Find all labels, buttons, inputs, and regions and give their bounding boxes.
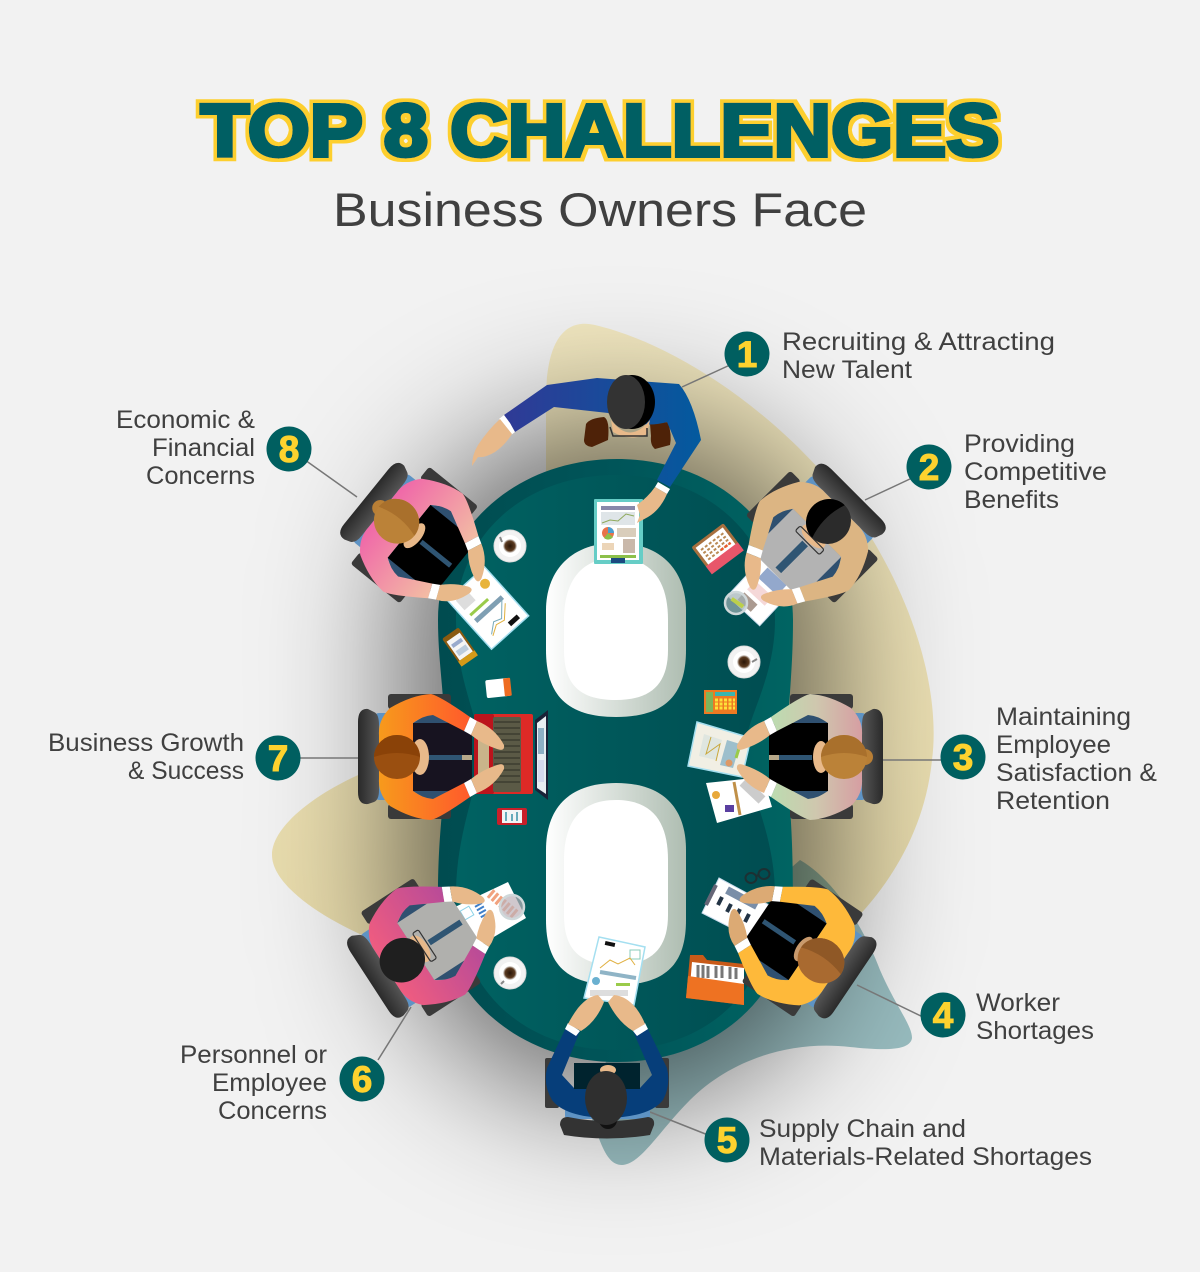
callout 2: Providing Competitive Benefits: 2 [919, 447, 939, 488]
callout 4: Worker Shortages: Worker [976, 989, 1060, 1017]
callout 6: Personnel or Employee Concerns [180, 1041, 384, 1125]
callout 2: Providing Competitive Benefits: Providing [964, 430, 1075, 458]
document 8 [447, 567, 529, 649]
document 6 [455, 882, 526, 947]
subtitle: Business Owners Face [333, 183, 867, 236]
callout 2: Providing Competitive Benefits: Benefits [964, 486, 1059, 514]
callout 1: Recruiting and Attracting New Talent: New Talent [782, 356, 912, 384]
document 2 [727, 556, 797, 626]
callout 1: Recruiting and Attracting New Talent: Recruiting & Attracting [782, 328, 1055, 356]
person 6: magenta jacket [335, 852, 522, 1034]
person 2: tan jacket [712, 449, 901, 638]
conference table [438, 459, 793, 1062]
callout 6: Personnel or Employee Concerns: Employee [212, 1069, 327, 1097]
table shadow [438, 459, 793, 1062]
document 3b [706, 777, 772, 823]
callout 3: Maintaining Employee Satisfaction and Retention: Employee [996, 731, 1111, 759]
person 4: yellow jacket [701, 851, 889, 1035]
callout 3: Maintaining Employee Satisfaction and Retention: Maintaining [996, 703, 1131, 731]
callout 4: Worker Shortages [920, 989, 1094, 1045]
notepad [485, 678, 512, 698]
title: TOP 8 CHALLENGES [200, 89, 1000, 172]
callout 8: Economic and Financial Concerns [116, 406, 312, 490]
phone on table left [442, 627, 478, 667]
coffee cup right [728, 646, 760, 678]
callout 5: Supply Chain and Materials-Related Shortages [704, 1115, 1092, 1171]
spiral planner [691, 523, 744, 574]
callout 3: Maintaining Employee Satisfaction and Retention: 3 [953, 737, 973, 778]
magnifier 6 [500, 895, 524, 919]
callout 6: Personnel or Employee Concerns: Personnel or [180, 1041, 327, 1069]
coffee cup bottom left [494, 957, 526, 989]
callout 6: Personnel or Employee Concerns: 6 [352, 1059, 372, 1100]
person 8: pink jacket [327, 448, 516, 634]
person 3: green and pink jacket [737, 694, 883, 820]
document 3a [688, 722, 751, 777]
callout 1: Recruiting and Attracting New Talent: 1 [737, 334, 757, 375]
callout 3: Maintaining Employee Satisfaction and Retention [940, 703, 1157, 815]
callout 7: Business Growth and Success: & Success [128, 757, 244, 785]
clipboard [594, 499, 643, 564]
callout 5: Supply Chain and Materials-Related Shortages: Supply Chain and [759, 1115, 966, 1143]
callout 4: Worker Shortages: Shortages [976, 1017, 1094, 1045]
person 7: orange jacket [358, 694, 504, 820]
callout 7: Business Growth and Success [48, 729, 300, 785]
callout 4: Worker Shortages: 4 [933, 995, 954, 1036]
callout 2: Providing Competitive Benefits [906, 430, 1107, 514]
callout 3: Maintaining Employee Satisfaction and Retention: Retention [996, 787, 1110, 815]
beige background blob [272, 324, 934, 1000]
person 5: navy jacket [545, 995, 669, 1138]
callout 2: Providing Competitive Benefits: Competitive [964, 458, 1107, 486]
laptop [474, 710, 548, 800]
person 1: standing in blue jacket [472, 375, 701, 523]
red phone [497, 808, 527, 825]
callout 6: Personnel or Employee Concerns: Concerns [218, 1097, 327, 1125]
callout 8: Economic and Financial Concerns: Economic & [116, 406, 255, 434]
coffee cup left top [494, 530, 526, 562]
document 4 [702, 878, 769, 938]
magnifier 2 [725, 592, 747, 614]
callout 8: Economic and Financial Concerns: Financial [152, 434, 255, 462]
callout 8: Economic and Financial Concerns: Concerns [146, 462, 255, 490]
callout 7: Business Growth and Success: Business Growth [48, 729, 244, 757]
callout 8: Economic and Financial Concerns: 8 [279, 429, 299, 470]
folder [686, 955, 744, 1005]
callout 7: Business Growth and Success: 7 [268, 738, 288, 779]
callout 3: Maintaining Employee Satisfaction and Retention: Satisfaction & [996, 759, 1157, 787]
callout 5: Supply Chain and Materials-Related Shortages: Materials-Related Shortages [759, 1143, 1092, 1171]
leader lines [300, 365, 945, 1135]
callout 5: Supply Chain and Materials-Related Shortages: 5 [717, 1120, 737, 1161]
document 5 [584, 937, 645, 1005]
calculator [704, 690, 737, 714]
glasses [746, 869, 770, 883]
teal background blob [585, 860, 912, 1165]
callout 1: Recruiting and Attracting New Talent [724, 328, 1055, 384]
